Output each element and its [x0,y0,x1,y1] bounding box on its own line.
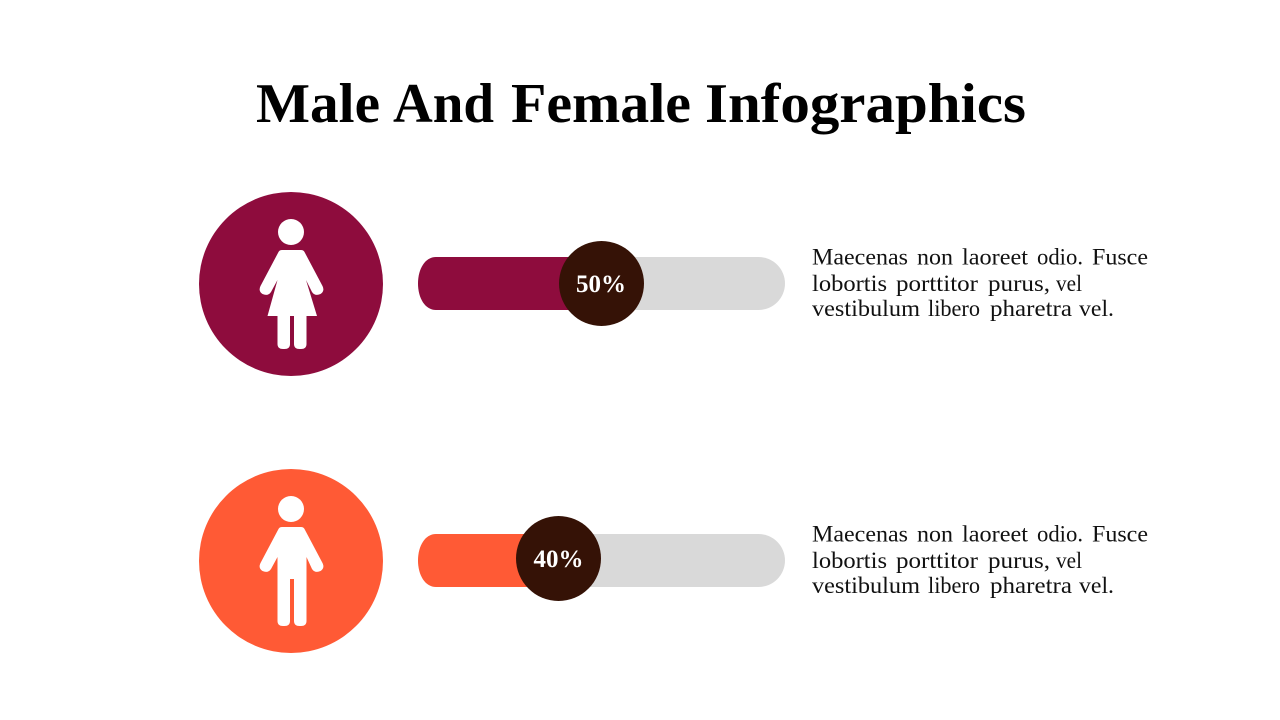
icon: male figure in circle [199,469,383,653]
text block: male description: porttitor [896,548,978,573]
title: Male [256,73,380,135]
text block: female description: vestibulum [812,296,920,321]
text block: male description: lobortis [812,548,887,573]
text block: female description: laoreet [962,244,1029,270]
title: Infographics [705,73,1026,135]
text block: female description [812,244,1148,321]
text block: female description: pharetra [990,296,1072,321]
text block: male description: pharetra [990,573,1072,598]
text block: female description: vel. [1079,296,1114,321]
text block: male description: Maecenas [812,522,908,546]
text block: male description: libero [928,573,980,598]
text block: female description: lobortis [812,271,887,296]
progress bar: 50%: 50% [576,271,626,298]
title: Female [511,73,691,135]
text block: male description [812,522,1148,598]
text block: female description: purus, [988,271,1050,296]
text block: female description: libero [928,296,980,321]
text block: male description: vel [1056,548,1082,573]
progress bar: 40% [418,516,785,601]
text block: female description: porttitor [896,271,978,296]
text block: female description: non [917,244,954,270]
text block: male description: laoreet [962,522,1029,546]
text block: male description: Fusce [1092,522,1148,546]
title [256,73,1026,135]
text block: female description: vel [1056,271,1082,296]
text block: male description: vestibulum [812,573,920,598]
text block: female description: odio. [1037,244,1083,270]
progress bar: 40%: 40% [534,546,584,573]
icon: female figure in circle [199,192,383,376]
row: female [199,192,1148,376]
text block: female description: Fusce [1092,244,1148,270]
text block: male description: odio. [1037,522,1083,546]
text block: female description: Maecenas [812,244,908,270]
text block: male description: vel. [1079,573,1114,598]
text block: male description: purus, [988,548,1050,573]
title: And [393,73,494,135]
text block: male description: non [917,522,954,546]
progress bar: 50% [418,241,785,326]
row: male [199,469,1148,653]
